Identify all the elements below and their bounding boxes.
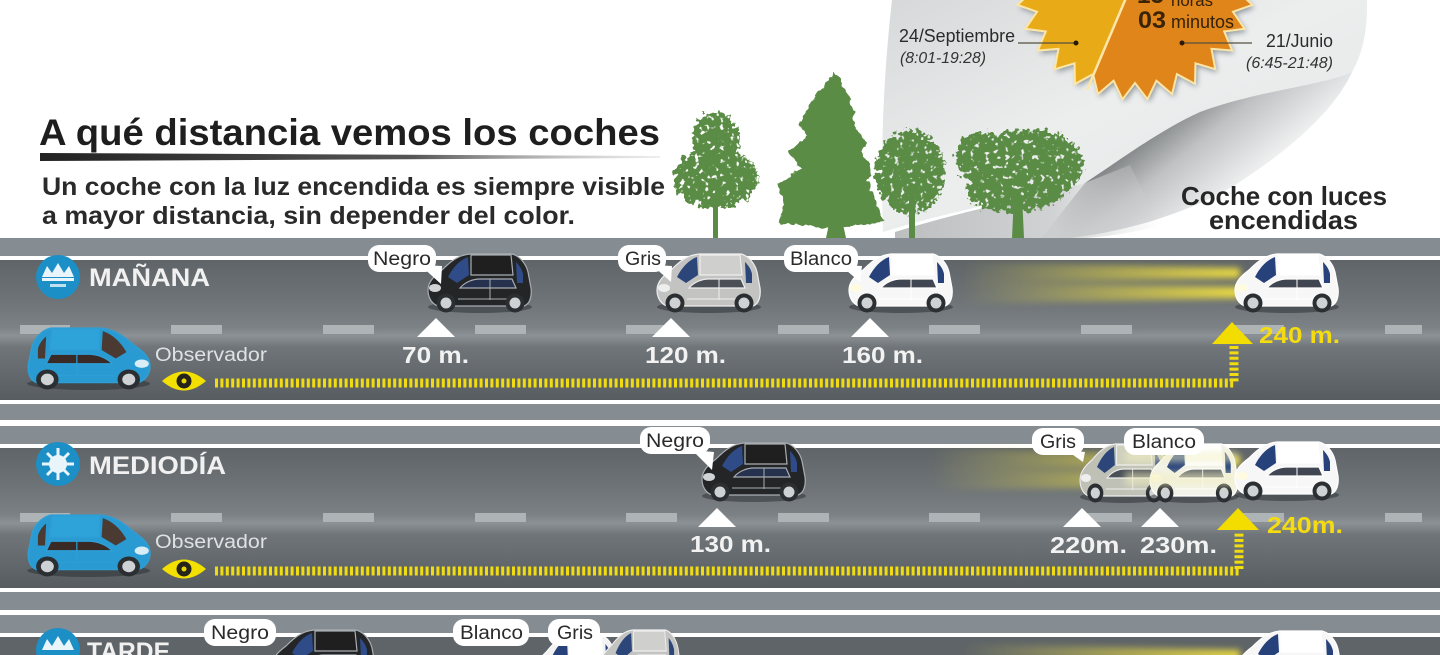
label: white	[784, 245, 862, 282]
sun shadow	[1017, 0, 1257, 102]
heading: MAÑANA	[89, 262, 210, 292]
road background	[0, 238, 1440, 655]
date label: june: 21/Junio	[1266, 31, 1333, 51]
car: white	[535, 636, 618, 655]
marker: 160 m	[842, 318, 923, 368]
intro text: a mayor distancia, sin depender del color.	[42, 202, 575, 230]
sight line	[215, 532, 1239, 571]
distance: lit car: 240 m.	[1259, 322, 1340, 348]
panel: tarde	[36, 619, 1342, 655]
yellow half of sun	[1016, 0, 1124, 86]
date label: june: (6:45-21:48)	[1246, 55, 1333, 72]
road dashes	[20, 325, 1422, 522]
sun divider	[1087, 0, 1126, 90]
icon: eye	[162, 372, 206, 390]
car: grey	[600, 630, 681, 655]
car: lights on	[1235, 254, 1339, 313]
orange half of sun	[1015, 0, 1255, 99]
label: grey: Gris	[625, 249, 661, 270]
marker: 220 m: 220m.	[1050, 532, 1127, 558]
label: white: Blanco	[460, 623, 523, 644]
icon: noon sun	[36, 442, 80, 486]
paper page	[882, 0, 1367, 232]
tree middle	[875, 130, 945, 240]
label: grey	[1032, 428, 1085, 462]
tree right	[956, 129, 1084, 238]
light streaks over cars	[1125, 452, 1237, 486]
left leader	[1018, 42, 1076, 44]
icon: afternoon sun	[36, 628, 80, 655]
sun diagram	[1015, 0, 1257, 102]
title rule	[40, 153, 660, 161]
label: black	[368, 245, 442, 284]
label: white	[453, 619, 529, 646]
icon: eye	[162, 560, 206, 578]
car: grey	[1080, 444, 1168, 503]
marker: 230 m	[1140, 508, 1217, 558]
panel: mediodía	[27, 427, 1343, 578]
tree left	[674, 112, 758, 240]
headlight beams	[960, 262, 1240, 304]
distance: lit car: 240m.	[1267, 512, 1343, 538]
minutes unit: minutos	[1171, 12, 1234, 32]
minutes text: 03	[1138, 7, 1166, 34]
car: lights on	[1235, 442, 1339, 501]
date label: september: 24/Septiembre	[899, 26, 1015, 46]
marker: 120 m	[645, 318, 726, 368]
trees	[674, 72, 1084, 240]
marker: 70 m: 70 m.	[402, 342, 469, 368]
curled paper sheet	[882, 0, 1367, 240]
left dot	[1074, 40, 1078, 46]
arrow: yellow marker	[1217, 508, 1259, 530]
car: black	[272, 630, 376, 655]
sight line	[215, 345, 1234, 383]
date label: june	[1246, 31, 1333, 72]
heading: MEDIODÍA	[89, 451, 226, 480]
car: white	[1150, 444, 1238, 503]
label: black	[640, 427, 714, 470]
car: black	[428, 254, 532, 313]
label: white	[1124, 428, 1204, 455]
car: lights on	[1238, 631, 1342, 655]
page curl	[1040, 72, 1352, 240]
car: observer	[27, 328, 150, 390]
marker: 70 m	[402, 318, 469, 368]
icon: morning sun	[36, 255, 80, 299]
label: observer: Observador	[155, 532, 268, 553]
label: lit car: Coche con luces	[1181, 181, 1387, 211]
label: lit car	[1181, 181, 1387, 235]
date label: september: (8:01-19:28)	[900, 50, 986, 67]
marker: 220 m	[1050, 508, 1127, 558]
conifer	[776, 72, 884, 238]
label: white: Blanco	[790, 249, 852, 270]
intro text	[42, 173, 665, 230]
label: black	[204, 619, 276, 646]
lower page shadow	[895, 165, 1160, 240]
label: black: Negro	[646, 431, 704, 452]
marker: 120 m: 120 m.	[645, 342, 726, 368]
label: lit car: encendidas	[1209, 205, 1358, 235]
panel: mañana	[27, 245, 1340, 390]
date label: september	[899, 26, 1015, 67]
marker: 160 m: 160 m.	[842, 342, 923, 368]
label: grey	[548, 619, 600, 646]
label: black: Negro	[373, 249, 431, 270]
marker: 230 m: 230m.	[1140, 532, 1217, 558]
right dot	[1180, 40, 1184, 46]
car: white	[849, 254, 953, 313]
title: A qué distancia vemos los coches	[39, 112, 660, 153]
arrow: yellow marker	[1212, 322, 1253, 344]
intro text: Un coche con la luz encendida es siempre visible	[42, 173, 665, 201]
car: observer	[27, 515, 150, 577]
label: white: Blanco	[1132, 432, 1196, 453]
marker: 130 m: 130 m.	[690, 531, 771, 557]
headlight beam	[960, 644, 1240, 655]
right leader	[1182, 42, 1252, 44]
headlight beams	[930, 448, 1240, 490]
label: black: Negro	[211, 623, 269, 644]
label: observer: Observador	[155, 345, 268, 366]
car: grey	[657, 254, 761, 313]
car: black	[702, 443, 806, 502]
label: grey: Gris	[557, 623, 593, 644]
marker: 130 m	[690, 508, 771, 557]
label: grey: Gris	[1040, 432, 1076, 453]
label: grey	[618, 245, 672, 282]
